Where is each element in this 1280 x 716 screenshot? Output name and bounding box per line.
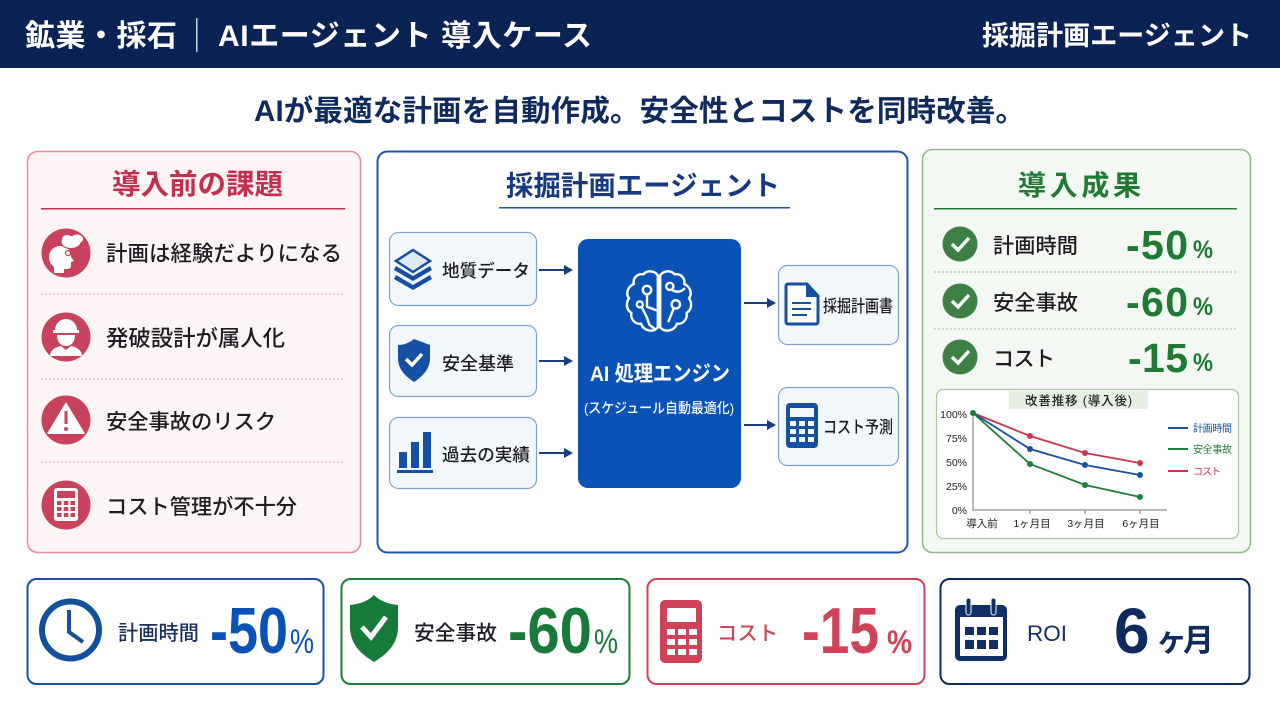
engine label: AI 処理エンジン <box>590 362 730 386</box>
icon: brain <box>627 271 691 331</box>
input: geological data: 地質データ <box>442 261 530 281</box>
KPI card: planning time <box>28 579 324 684</box>
KPI card: safety accidents: % <box>594 623 618 661</box>
panel: mining plan agent <box>378 152 908 552</box>
AI engine block <box>578 239 741 488</box>
KPI card: cost: コスト <box>717 623 778 645</box>
header right label: 採掘計画エージェント <box>982 21 1252 51</box>
KPI card: planning time: % <box>290 623 314 661</box>
KPI card: ROI <box>940 579 1250 684</box>
input: geological data <box>390 232 536 306</box>
KPI card: safety accidents <box>342 579 630 684</box>
engine sublabel: (スケジュール自動最適化) <box>584 400 734 416</box>
panel: results <box>922 150 1250 552</box>
result: cost: コスト <box>993 348 1055 371</box>
chart axes <box>973 413 1167 514</box>
challenge: cost management: コスト管理が不十分 <box>106 495 297 519</box>
agent heading: 採掘計画エージェント <box>506 170 780 201</box>
output: cost forecast <box>778 388 898 466</box>
KPI card: cost: % <box>887 624 912 660</box>
challenges heading: 導入前の課題 <box>112 169 283 201</box>
KPI card: planning time: 計画時間 <box>118 622 199 645</box>
input: past results: 過去の実績 <box>442 445 530 465</box>
challenge: experience-dependent planning: 計画は経験だよりになる <box>106 242 342 266</box>
chart legend: コスト <box>1193 467 1221 478</box>
series: cost <box>973 413 1143 466</box>
header title <box>25 18 592 53</box>
challenge: blasting design <box>42 312 285 362</box>
series: safety accidents <box>970 410 1143 500</box>
result: cost: % <box>1193 349 1213 377</box>
input: safety standards <box>390 326 536 396</box>
icon: calculator <box>660 600 702 663</box>
icon: shield <box>350 595 398 662</box>
subtitle: AIが最適な計画を自動作成。安全性とコストを同時改善。 <box>254 94 1025 128</box>
x axis labels: 6ヶ月目 <box>1122 518 1160 530</box>
y axis labels: 0% <box>952 505 967 517</box>
header title: AIエージェント 導入ケース <box>218 20 592 53</box>
results heading: 導入成果 <box>1018 170 1141 201</box>
KPI card: cost <box>648 579 924 684</box>
y axis labels: 50% <box>946 457 967 469</box>
chart legend: 計画時間 <box>1193 423 1232 435</box>
output: mining plan document: 採掘計画書 <box>823 297 893 316</box>
KPI card: safety accidents: -60 <box>508 594 592 667</box>
output: cost forecast: コスト予測 <box>823 418 893 437</box>
challenge: blasting design: 発破設計が属人化 <box>106 326 285 351</box>
header bar <box>0 0 1280 68</box>
arrows: engine to outputs <box>744 298 776 430</box>
arrows: inputs to engine <box>539 265 573 458</box>
y axis labels <box>940 409 967 517</box>
y axis labels: 100% <box>940 409 967 421</box>
y axis labels: 25% <box>946 481 967 493</box>
result: safety accidents: 安全事故 <box>993 291 1078 315</box>
chart title: 改善推移 (導入後) <box>1025 393 1132 408</box>
input: past results <box>390 418 536 488</box>
line chart: improvement trend <box>936 390 1238 538</box>
chart legend <box>1168 423 1232 478</box>
result: planning time: % <box>1193 236 1213 264</box>
chart legend: 安全事故 <box>1193 443 1232 456</box>
KPI card: safety accidents: 安全事故 <box>414 622 497 645</box>
challenge: safety accident risk <box>42 396 276 444</box>
y axis labels: 75% <box>946 433 967 445</box>
result: planning time <box>942 222 1213 268</box>
KPI card: ROI: ヶ月 <box>1156 623 1214 658</box>
result: cost <box>942 335 1213 381</box>
input: safety standards: 安全基準 <box>442 354 514 374</box>
KPI card: ROI: ROI <box>1027 621 1067 646</box>
result: safety accidents <box>942 279 1213 325</box>
KPI card: cost: -15 <box>802 594 879 667</box>
KPI card: ROI: 6 <box>1114 595 1150 667</box>
icon: calendar <box>955 598 1007 661</box>
x axis labels: 1ヶ月目 <box>1013 518 1051 530</box>
challenge: cost management <box>42 480 297 530</box>
result: safety accidents: -60 <box>1126 279 1188 325</box>
challenge: experience-dependent planning <box>42 228 342 278</box>
result: planning time: 計画時間 <box>993 234 1078 258</box>
header title: 鉱業・採石 <box>25 20 177 53</box>
output: mining plan document <box>778 266 898 344</box>
challenge: safety accident risk: 安全事故のリスク <box>106 410 276 434</box>
result: cost: -15 <box>1128 335 1188 381</box>
panel: challenges before adoption <box>28 152 360 552</box>
series: planning time <box>973 413 1143 478</box>
result: safety accidents: % <box>1193 293 1213 321</box>
KPI card: planning time: -50 <box>210 594 288 667</box>
result: planning time: -50 <box>1126 222 1188 268</box>
icon: clock <box>42 602 99 658</box>
x axis labels: 3ヶ月目 <box>1067 518 1105 530</box>
x axis labels: 導入前 <box>966 517 998 530</box>
x axis labels <box>966 517 1160 530</box>
